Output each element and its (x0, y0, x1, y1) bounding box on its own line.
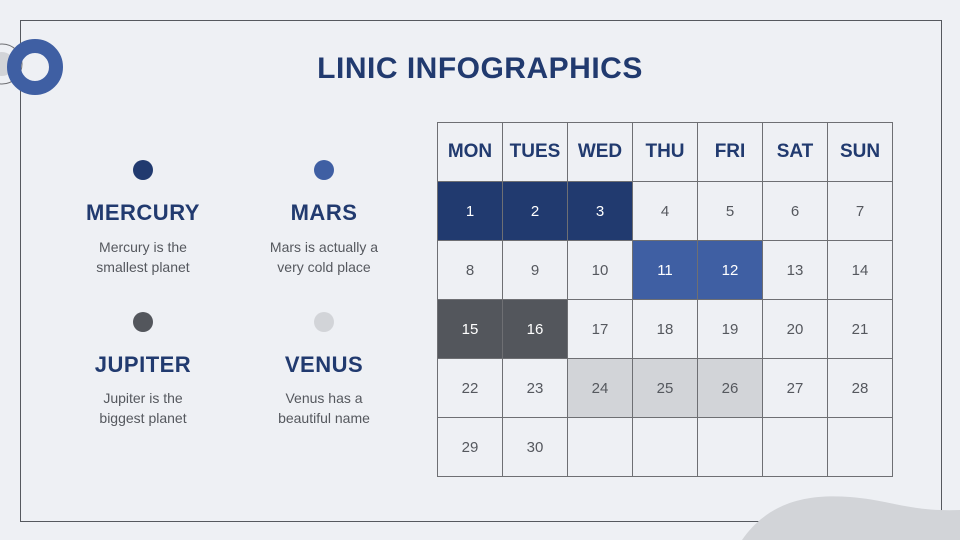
title: LINIC INFOGRAPHICS (317, 52, 643, 85)
item: mercury: smallest planet (96, 259, 190, 275)
calendar: FRI (715, 141, 745, 162)
item: venus: beautiful name (278, 410, 370, 426)
calendar: 24 (592, 380, 608, 396)
calendar: 6 (791, 202, 799, 220)
top-left ring decoration (0, 39, 63, 95)
item: jupiter: biggest planet (99, 410, 187, 426)
item: mercury (86, 160, 200, 275)
calendar: 11 (657, 262, 673, 278)
calendar: MON (448, 141, 492, 162)
calendar: 23 (527, 380, 543, 396)
calendar: 15 (462, 320, 478, 338)
calendar: 17 (592, 320, 608, 338)
item: mars (270, 160, 378, 275)
calendar: WED (578, 141, 622, 162)
calendar: TUES (510, 141, 560, 162)
calendar: 7 (856, 202, 864, 220)
calendar: 14 (852, 262, 868, 278)
calendar: 1 (466, 202, 474, 220)
calendar: 13 (787, 262, 803, 278)
item: jupiter: Jupiter is the (103, 390, 183, 406)
calendar: 3 (596, 202, 604, 220)
calendar: 16 (527, 320, 543, 338)
calendar: 29 (462, 438, 478, 456)
calendar: 27 (787, 380, 803, 396)
item: mars: MARS (291, 200, 357, 225)
item: mercury: MERCURY (86, 200, 200, 225)
calendar: 4 (661, 202, 669, 220)
calendar: 20 (787, 320, 803, 338)
calendar: 26 (722, 380, 738, 396)
calendar (437, 122, 893, 477)
calendar: 10 (592, 262, 608, 278)
item: mercury: Mercury is the (99, 239, 187, 255)
calendar: 25 (657, 380, 673, 396)
calendar: 8 (466, 262, 474, 278)
calendar: 2 (531, 202, 539, 220)
item: mars: Mars is actually a (270, 239, 378, 255)
calendar: 21 (852, 320, 868, 338)
calendar: 30 (527, 438, 543, 456)
calendar: 9 (531, 262, 539, 278)
calendar: 28 (852, 380, 868, 396)
calendar: 5 (726, 202, 734, 220)
calendar: 22 (462, 380, 478, 396)
item: jupiter (95, 312, 191, 426)
calendar: 19 (722, 320, 738, 338)
calendar: SAT (777, 141, 813, 162)
calendar: 12 (722, 262, 738, 278)
calendar: THU (645, 141, 685, 162)
calendar: 18 (657, 320, 673, 338)
item: jupiter: JUPITER (95, 352, 191, 377)
item: venus: VENUS (285, 352, 363, 377)
item: mars: very cold place (277, 259, 371, 275)
calendar: SUN (840, 141, 880, 162)
item: venus: Venus has a (285, 390, 363, 406)
item: venus (278, 312, 370, 426)
